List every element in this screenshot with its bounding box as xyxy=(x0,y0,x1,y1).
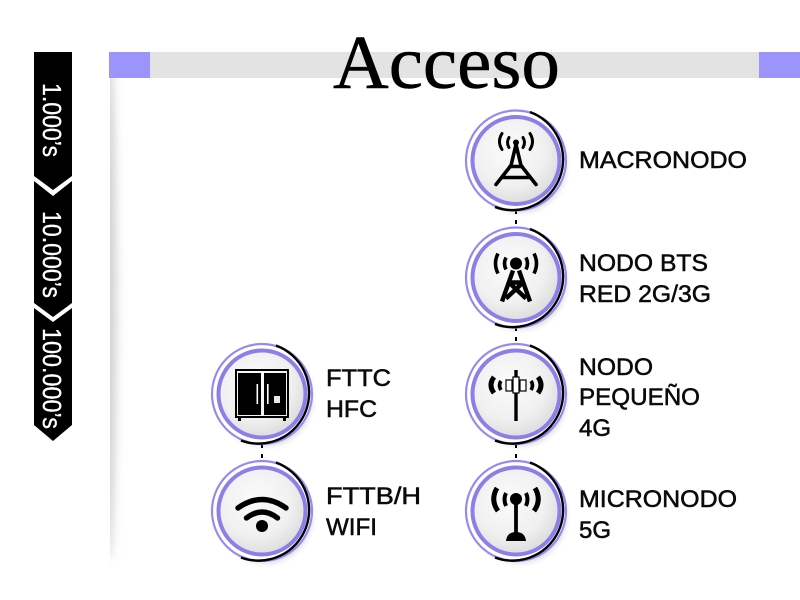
label: micronodo: 5G xyxy=(579,517,611,544)
connector: pequeño to micronodo xyxy=(515,441,517,470)
label: pequeño: 4G xyxy=(579,415,611,442)
label: BTS: RED 2G/3G xyxy=(579,281,711,308)
label: BTS xyxy=(579,250,711,308)
node: micronodo xyxy=(466,461,566,563)
icon: small cell xyxy=(491,370,541,421)
node: FTTB/H WIFI xyxy=(212,461,312,563)
label: FTTB/H WIFI: WIFI xyxy=(326,514,377,541)
segment: 100.000's: 100.000’s xyxy=(37,328,67,429)
header bar xyxy=(109,52,800,78)
icon: street cabinet xyxy=(236,370,288,421)
node: FTTC HFC xyxy=(212,344,312,446)
label: BTS: NODO BTS xyxy=(579,250,708,277)
connector: FTTC to FTTB xyxy=(261,441,263,470)
label: pequeño: PEQUEÑO xyxy=(579,384,700,411)
segment: 1.000's xyxy=(34,52,72,190)
node: pequeño xyxy=(466,344,566,446)
label: FTTB/H WIFI: FTTB/H xyxy=(326,483,421,510)
label: pequeño: NODO xyxy=(579,354,653,381)
node: macronodo xyxy=(466,110,566,212)
segment: 10.000's: 10.000’s xyxy=(37,211,67,298)
label: FTTC HFC: HFC xyxy=(326,396,377,423)
label: macronodo: MACRONODO xyxy=(579,147,747,174)
connector: BTS to pequeño xyxy=(515,324,517,353)
icon: BTS tower xyxy=(496,254,536,302)
connector: macronodo to BTS xyxy=(515,207,517,236)
label: micronodo: MICRONODO xyxy=(579,486,737,513)
icon: wifi xyxy=(238,500,286,532)
label: FTTC HFC: FTTC xyxy=(326,365,391,392)
label: FTTC HFC xyxy=(326,365,391,423)
left panel shadow xyxy=(110,78,120,556)
label: micronodo xyxy=(579,486,737,544)
icon: micro antenna xyxy=(494,488,538,541)
segment: 10.000's xyxy=(34,181,72,317)
label: pequeño xyxy=(579,354,700,442)
segment: 1.000's: 1.000’s xyxy=(37,83,67,157)
scale arrow: reach in users xyxy=(34,52,72,441)
segment: 100.000's xyxy=(34,308,72,441)
node: BTS xyxy=(466,228,566,330)
label: FTTB/H WIFI xyxy=(326,483,421,541)
title: Acceso xyxy=(333,21,560,105)
icon: macro tower xyxy=(496,134,536,184)
